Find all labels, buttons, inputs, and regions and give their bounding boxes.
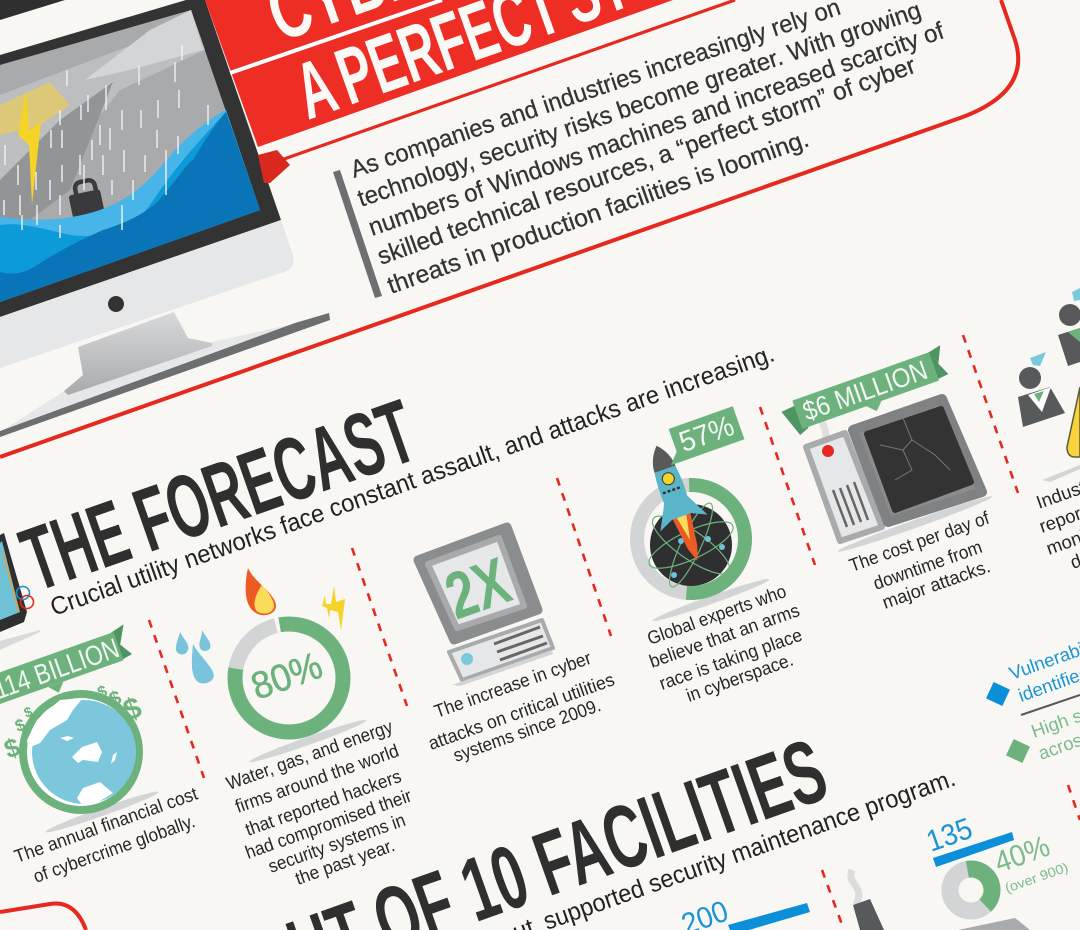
caption: had compromised their [242, 785, 414, 863]
caption: The annual financial cost [11, 783, 200, 867]
intro text: numbers of Windows machines and increased scarcity of [365, 17, 948, 242]
icon: computer monitor with storm [0, 0, 330, 437]
caption: Water, gas, and energy [223, 715, 396, 794]
tag: 57% [659, 406, 744, 465]
caption [223, 715, 414, 889]
value 80%: 80% [246, 645, 328, 708]
icon: dollar signs: $ [106, 687, 124, 711]
chart: 135 bar and 40% donut: (over 900) [1003, 860, 1070, 896]
caption: downtime from [870, 536, 985, 594]
ribbon: $6 million: $6 MILLION [799, 355, 931, 427]
icon: dollar signs: $ [0, 731, 24, 765]
shadow [651, 576, 771, 624]
donut 57% [635, 483, 747, 595]
value 2X: 2X [436, 543, 519, 633]
caption: attacks on critical utilities [425, 669, 617, 754]
item: industrial reports [1018, 288, 1080, 573]
caption [644, 580, 805, 706]
caption: The increase in cyber [431, 647, 594, 722]
item: hacked utilities 80% [176, 568, 414, 889]
chart: 135 bar and 40% donut [922, 812, 1070, 914]
legend: vulnerabilities [986, 626, 1080, 706]
red frame and plug cable [0, 0, 1018, 457]
caption: systems since 2009. [450, 694, 603, 766]
icon: dollar signs: $ [119, 691, 146, 728]
item: cost of downtime [778, 345, 994, 613]
donut 80% [226, 615, 352, 741]
icon: dollar signs: $ [95, 683, 110, 702]
item: 2X attacks [418, 527, 617, 766]
icon: people and warning sign [1018, 288, 1080, 482]
caption: Global experts who [644, 580, 789, 649]
icon: water drops [176, 630, 214, 683]
panel: red frame corner [0, 904, 86, 930]
heading: the forecast: THE FORECAST [10, 382, 428, 611]
caption: that reported hackers [242, 765, 404, 840]
icon: broken computer [806, 399, 982, 541]
shadow [248, 717, 368, 765]
icon: rocket [633, 437, 721, 569]
icon: factory smokestack [851, 870, 1030, 930]
intro text: threats in production facilities is looming. [384, 126, 812, 300]
caption: security systems in [265, 809, 408, 877]
tag: 57%: 57% [675, 410, 738, 459]
caption: of cybercrime globally. [30, 810, 198, 887]
caption: believe that an arms [646, 599, 802, 672]
caption: firms around the world [232, 740, 401, 817]
shadow [836, 493, 994, 555]
ribbon: $6 million [778, 345, 954, 441]
icon: dollar signs: $ [13, 715, 28, 736]
subheading: forecast: Crucial utility networks face constant assault, and attacks are increasing. [47, 340, 778, 622]
caption: major attacks. [879, 555, 993, 613]
item: cyber arms race 57% [633, 406, 805, 706]
icon: planet [643, 499, 739, 591]
donut 40% [947, 866, 995, 914]
shadow [44, 788, 160, 836]
icon: padlock [68, 179, 106, 225]
caption: The cost per day of [846, 507, 993, 576]
chart: 135 bar and 40% donut: 135 [922, 812, 977, 859]
chart: 135 bar and 40% donut: 40% [990, 830, 1054, 880]
caption [1033, 468, 1080, 573]
chart: 200 bar [677, 895, 810, 930]
header banner [205, 0, 748, 147]
dashed dividers [149, 335, 1080, 930]
intro bar [333, 170, 382, 298]
icon: flame [246, 568, 276, 615]
icon: tablet at left edge [0, 533, 40, 650]
caption: in cyberspace. [683, 649, 796, 706]
icon: lightning bolts [322, 586, 345, 630]
caption [846, 507, 993, 613]
icon: dollar signs: $ [22, 703, 35, 721]
icon: dollar signs [0, 683, 146, 765]
intro text: skilled technical resources, a “perfect storm” of cyber [374, 52, 919, 271]
icon: old computer [418, 527, 553, 686]
icon: globe [23, 694, 139, 810]
caption: race is taking place [656, 624, 805, 694]
legend: high severity [1006, 686, 1080, 764]
item: cybercrime cost [0, 624, 200, 887]
caption: the past year. [292, 834, 397, 889]
legend [986, 626, 1080, 764]
